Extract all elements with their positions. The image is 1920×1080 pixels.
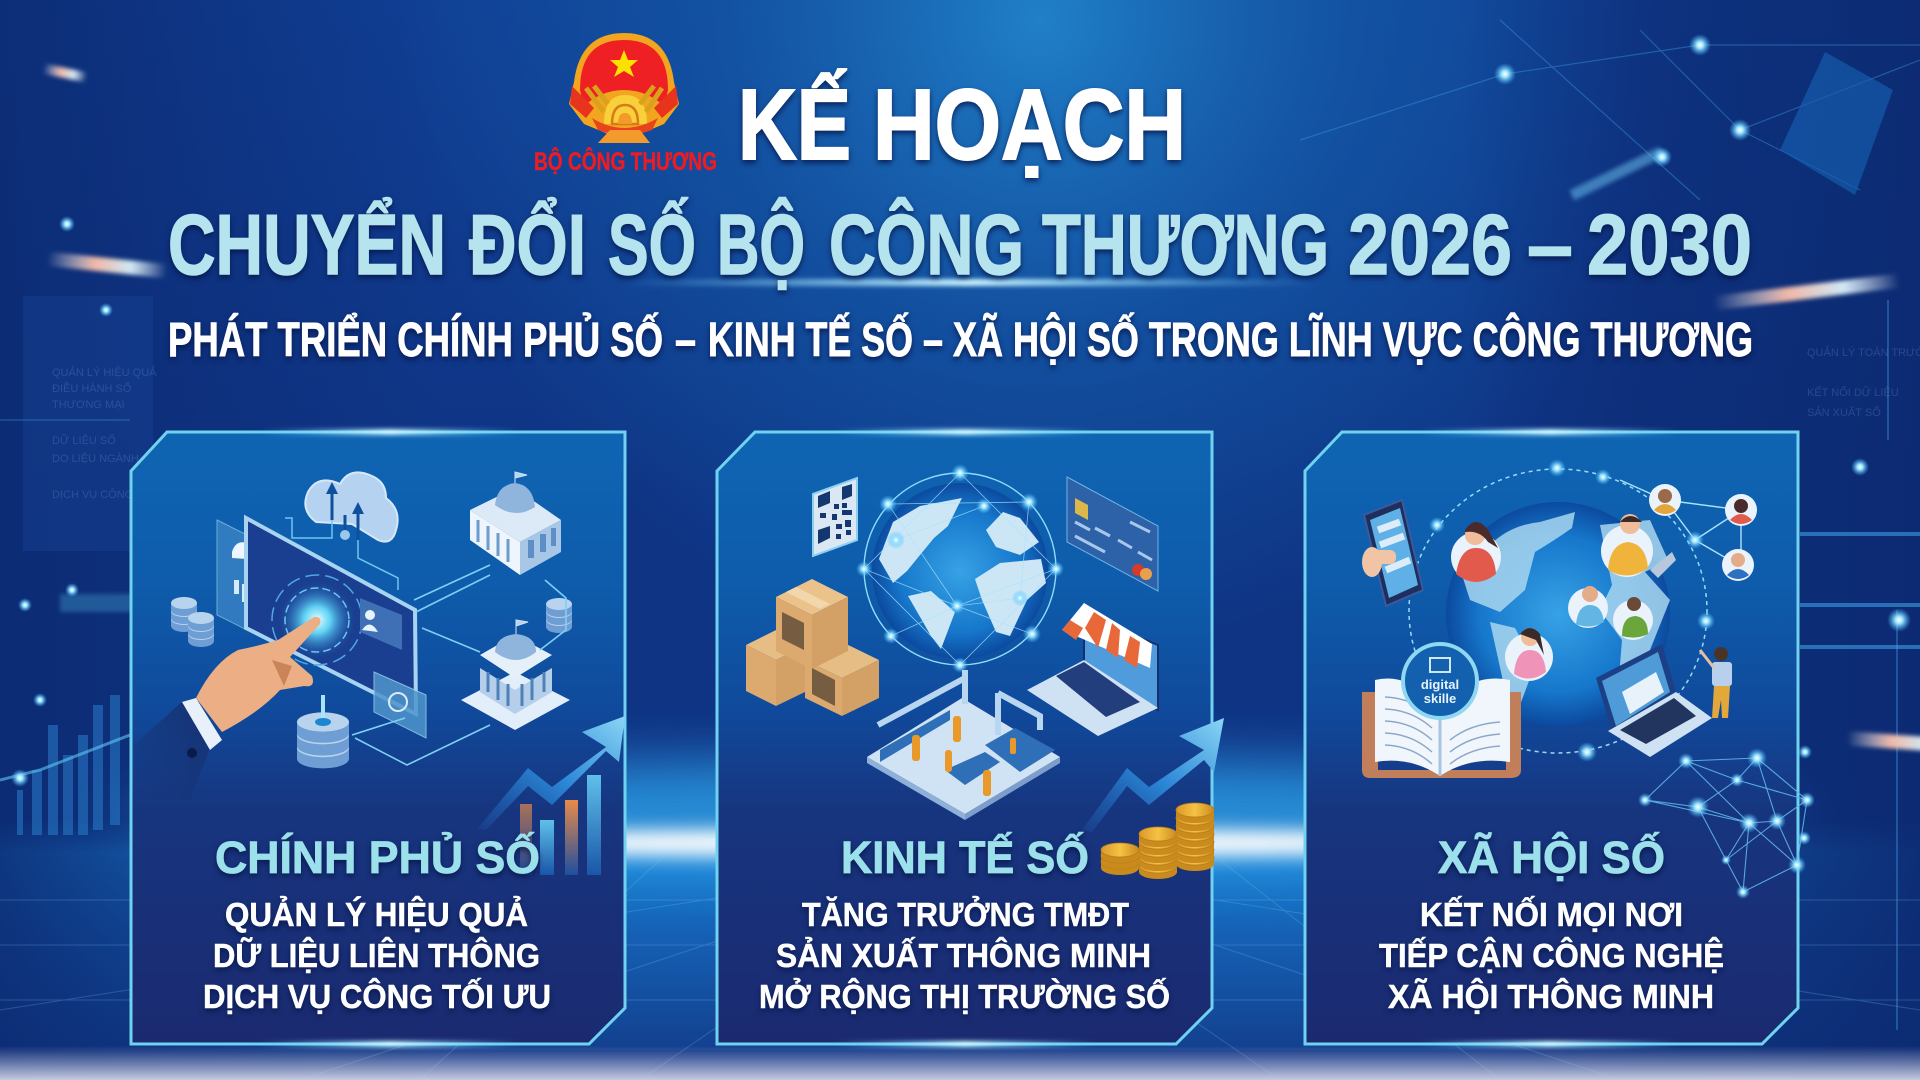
background: QUẢN LÝ HIỆU QUẢ [52,366,157,379]
main title: HOẠCH [873,69,1186,181]
icon: growth arrow with bars [478,716,625,875]
background: KẾT NỐI DỮ LIỆU [1807,385,1899,399]
tagline [168,312,1753,367]
icon: pointing hand [134,617,320,800]
icon: smartphone [1362,500,1423,606]
icon: cardboard boxes [746,579,879,716]
icon: gold coin stacks [1101,803,1214,879]
icon: online store laptop [1027,603,1158,736]
network nodes [1638,748,1815,899]
tagline: KINH TẾ SỐ [708,312,913,367]
subtitle: digital transformation: BỘ [717,197,805,293]
icon: laptop with presenter [1596,644,1732,757]
subtitle: digital transformation [168,197,1752,293]
main title: KẾ [738,69,851,181]
background: DỊCH VỤ CÔNG [52,488,133,501]
panel lines: TIẾP CẬN CÔNG NGHỆ [1379,936,1724,974]
panel lines [203,896,551,1015]
icon: tablet screen with target [217,518,426,738]
panel: digital economy [717,429,1224,1047]
icon: credit card [1067,477,1158,591]
panel lines: XÃ HỘI THÔNG MINH [1388,977,1714,1015]
tagline: PHÁT TRIỂN CHÍNH PHỦ SỐ [168,312,663,367]
panel heading: XÃ HỘI SỐ [1438,832,1665,883]
panel lines: MỞ RỘNG THỊ TRƯỜNG SỐ [759,977,1170,1015]
panel: digital society [1305,429,1815,1047]
subtitle: digital transformation: CÔNG [829,197,1024,293]
ministry name: BỘ CÔNG THƯƠNG [534,146,717,176]
icon: government building bottom [461,620,570,730]
panel lines [759,896,1170,1015]
panel lines: DỊCH VỤ CÔNG TỐI ƯU [203,977,551,1015]
background: ĐIỀU HÀNH SỐ [52,381,132,395]
panel lines: QUẢN LÝ HIỆU QUẢ [225,896,528,933]
panel lines: SẢN XUẤT THÔNG MINH [776,936,1151,974]
icon: QR code [813,478,857,556]
tagline: – [675,314,696,367]
subtitle: digital transformation: SỐ [608,197,696,293]
icon: smart factory [867,670,1060,820]
icon: globe with network [856,464,1064,673]
panel lines [1379,895,1724,1015]
panel heading: KINH TẾ SỐ [841,832,1089,883]
subtitle: digital transformation: ĐỔI [469,197,586,293]
icon: growth arrow [1082,718,1224,832]
panel lines: KẾT NỐI MỌI NƠI [1420,895,1683,933]
subtitle: digital transformation: 2030 [1587,198,1752,293]
panel heading: CHÍNH PHỦ SỐ [215,832,540,883]
panel: digital government [131,429,625,1047]
background: DO LIỆU NGÀNH [52,452,139,465]
main title [738,69,1186,181]
icon: data stacks [171,597,572,768]
subtitle: digital transformation: 2026 [1348,198,1512,293]
background: DỮ LIỆU SỐ [52,433,116,447]
icon: cloud upload [285,472,398,590]
icon: people avatars [1451,480,1757,681]
glow line under title [620,279,1320,286]
icon: government building top [470,472,561,575]
subtitle: digital transformation: CHUYỂN [168,197,446,293]
panel lines: DỮ LIỆU LIÊN THÔNG [213,936,540,974]
emblem: national coat of arms [569,33,679,143]
subtitle: digital transformation: – [1527,198,1573,293]
icon: open book with badge [1362,644,1521,778]
icon: network mesh [1645,758,1807,892]
background: THƯƠNG MẠI [52,399,125,411]
icon: open book with badge: digital [1421,677,1459,692]
connector arrows [352,565,566,765]
icon: open book with badge: skille [1424,691,1456,706]
tagline: – [923,314,943,367]
subtitle: digital transformation: THƯƠNG [1042,198,1329,293]
background: SẢN XUẤT SỐ [1807,405,1881,419]
icon: world globe [1409,459,1715,762]
panel lines: TĂNG TRƯỞNG TMĐT [802,896,1129,933]
